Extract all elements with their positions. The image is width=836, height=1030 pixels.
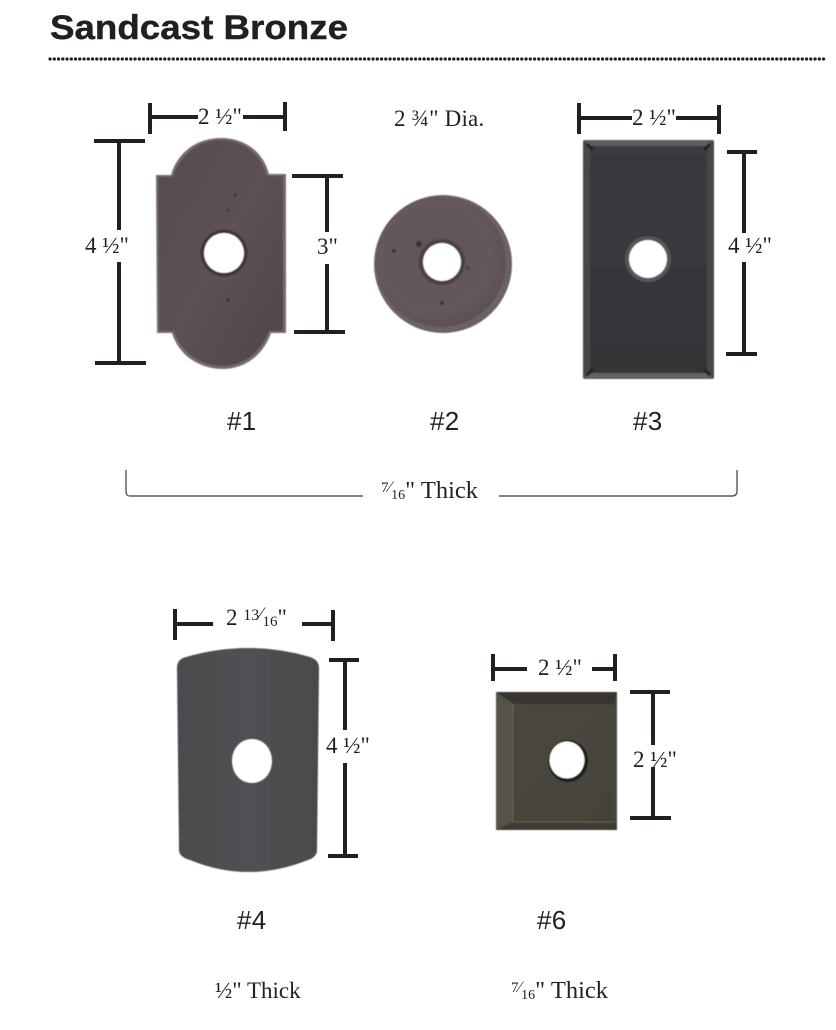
- dimension: width 2 13/16 in: 16: [262, 614, 278, 630]
- title: Sandcast Bronze: [50, 9, 348, 47]
- dimension: width 2 13/16 in: ": [277, 605, 287, 630]
- thickness 7/16 in: ⁄: [516, 979, 524, 996]
- thickness 1/2 in: ½" Thick: [215, 978, 301, 1003]
- dimension: width 2 1/2 in: [150, 102, 285, 134]
- bracket: 7/16 in thick: " Thick: [405, 477, 479, 504]
- bracket: 7/16 in thick: 16: [391, 488, 405, 503]
- label #4: #4: [237, 905, 267, 935]
- plate 2 photo: [374, 195, 512, 333]
- label #1: #1: [227, 406, 257, 436]
- dimension: width 2 13/16 in: 2: [226, 605, 243, 630]
- bracket: 7/16 in thick: ⁄: [386, 479, 394, 496]
- dimension: width 2 13/16 in: ⁄: [255, 604, 266, 625]
- plate 4 photo: [177, 648, 319, 872]
- label #3: #3: [633, 406, 663, 436]
- dimension: 2 3/4 in diameter: 2 ¾" Dia.: [394, 106, 484, 131]
- dimension: height 3 in: [292, 176, 345, 332]
- thickness 7/16 in: " Thick: [535, 977, 609, 1004]
- dotted title rule: [50, 57, 824, 61]
- dimension: height 4 1/2 in: [85, 141, 146, 363]
- dimension: width 2 1/2 in: 2 ½": [538, 655, 582, 680]
- dimension: width 2 13/16 in: [175, 604, 333, 641]
- dimension: height 4 1/2 in: 4 ½": [326, 733, 370, 758]
- thickness 7/16 in: 16: [521, 988, 535, 1003]
- plate 6 photo: [496, 692, 617, 830]
- panel: plate 4: [175, 604, 370, 1003]
- dimension: height 4 1/2 in: 4 ½": [85, 233, 129, 258]
- panel: plate 2: [374, 106, 512, 436]
- label #2: #2: [430, 406, 460, 436]
- plate 3 photo: [583, 140, 714, 379]
- bracket: 7/16 in thick: [126, 470, 737, 504]
- panel: plate 3: [579, 103, 772, 436]
- dimension: width 2 13/16 in: 13: [243, 607, 259, 624]
- dimension: width 2 1/2 in: 2 ½": [198, 104, 242, 129]
- bracket: 7/16 in thick: 7: [381, 480, 389, 496]
- dimension: height 4 1/2 in: [326, 660, 370, 856]
- dimension: height 4 1/2 in: 4 ½": [728, 233, 772, 258]
- label #6: #6: [537, 905, 567, 935]
- panel: plate 6: [493, 654, 677, 1004]
- dimension: height 3 in: 3": [317, 234, 338, 259]
- dimension: width 2 1/2 in: [493, 654, 615, 681]
- dimension: height 2 1/2 in: [630, 692, 677, 818]
- panel: plate 1: [85, 102, 345, 436]
- dimension: height 4 1/2 in: [726, 152, 772, 354]
- thickness 7/16 in: 7: [511, 980, 519, 996]
- dimension: width 2 1/2 in: 2 ½": [632, 105, 676, 130]
- dimension: height 2 1/2 in: 2 ½": [633, 747, 677, 772]
- plate 1 photo: [156, 138, 286, 369]
- dimension: width 2 1/2 in: [579, 103, 719, 134]
